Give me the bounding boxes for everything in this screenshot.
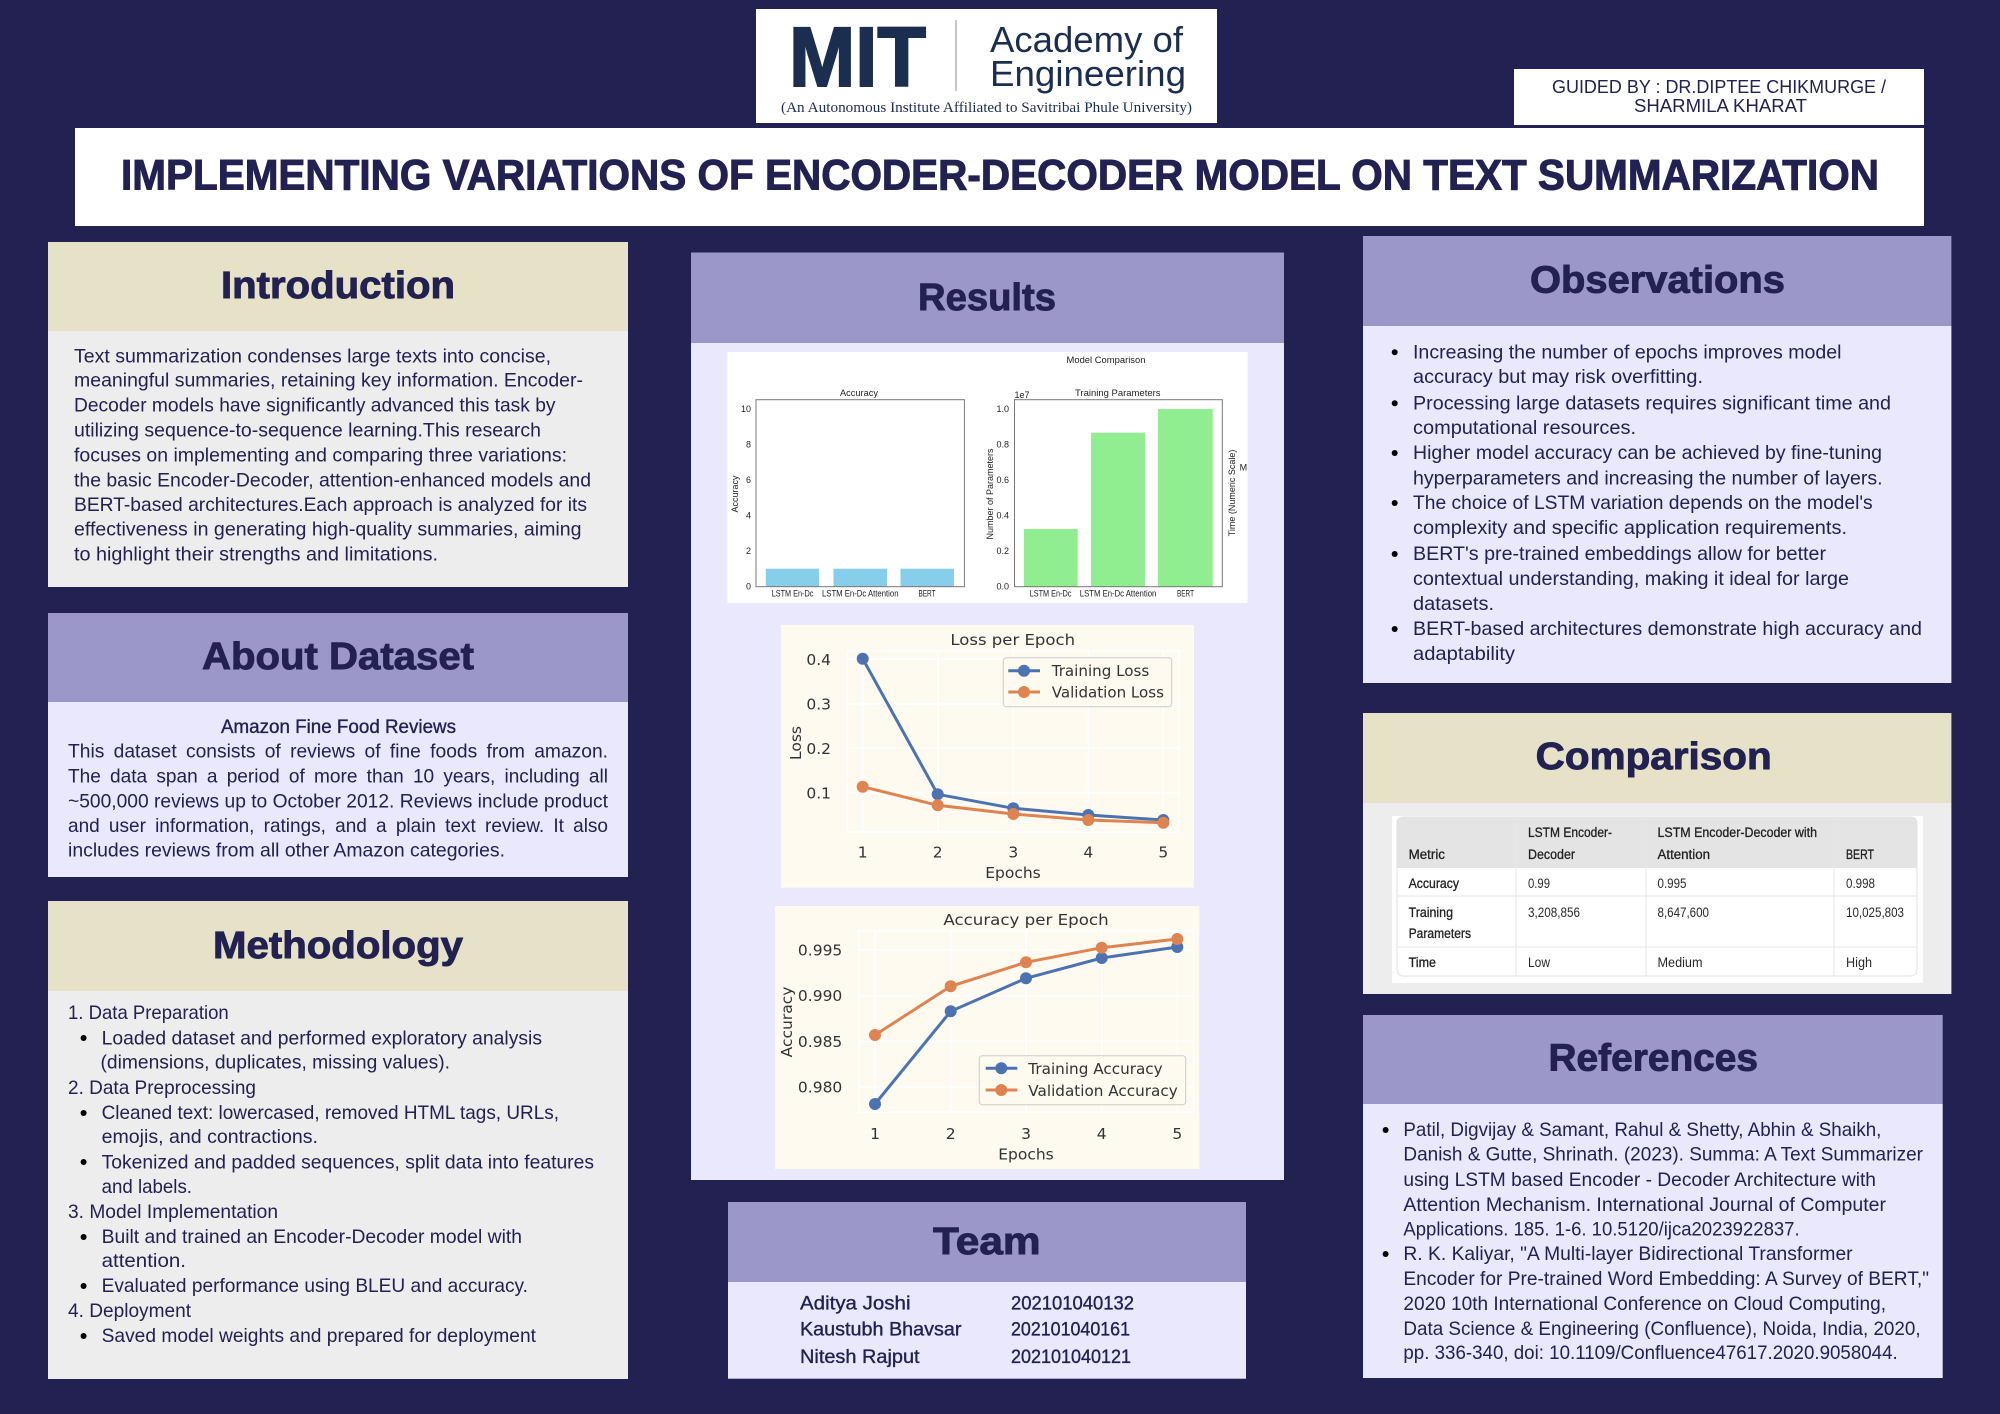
chart: model comparison bars: 0 — [746, 582, 751, 592]
table: model metrics: Decoder — [1528, 847, 1575, 862]
panel: methodology — [48, 901, 628, 1379]
panel: observations: contextual understanding, making it ideal for large — [1413, 568, 1849, 590]
panel: team: 202101040161 — [1011, 1319, 1130, 1341]
chart: loss per epoch: Epochs — [985, 864, 1041, 882]
chart: model comparison bars: Training Parameters — [1075, 388, 1161, 398]
panel: team: Aditya Joshi — [800, 1292, 910, 1314]
chart: accuracy per epoch: Accuracy — [778, 987, 796, 1057]
panel: observations: BERT's pre-trained embeddings allow for better — [1413, 543, 1826, 565]
chart: accuracy per epoch: 2 — [946, 1125, 956, 1143]
panel: references: References — [1548, 1038, 1758, 1080]
chart: model comparison bars: 0.0 — [996, 582, 1009, 592]
chart: model comparison bars: Model Comparison — [1066, 355, 1146, 365]
chart: model comparison bars: Me — [1240, 463, 1252, 473]
chart: model comparison bars: LSTM En-Dc — [772, 589, 814, 599]
chart: accuracy per epoch: 0.980 — [798, 1078, 842, 1096]
chart: loss per epoch: 4 — [1083, 844, 1093, 862]
chart: accuracy per epoch: 5 — [1172, 1125, 1182, 1143]
chart: accuracy per epoch: 4 — [1097, 1125, 1107, 1143]
chart: loss per epoch: Loss — [787, 726, 805, 760]
logo: MIT Academy of Engineering: MIT — [789, 10, 926, 104]
chart: model comparison bars: 4 — [746, 510, 751, 520]
panel: observations: hyperparameters and increasing the number of layers. — [1413, 467, 1883, 489]
table: model metrics: 0.99 — [1528, 876, 1550, 891]
title — [75, 128, 1924, 226]
panel: references: R. K. Kaliyar, "A Multi-layer Bidirectional Transformer — [1403, 1243, 1853, 1265]
chart: accuracy per epoch: Training Accuracy — [1027, 1060, 1163, 1078]
panel: methodology: 3. Model Implementation — [68, 1201, 278, 1223]
table: model metrics: Metric — [1409, 847, 1445, 862]
panel: methodology: Evaluated performance using BLEU and accuracy. — [102, 1275, 528, 1297]
table: model metrics: Training — [1409, 905, 1453, 920]
logo: MIT Academy of Engineering: Engineering — [990, 53, 1186, 94]
panel: comparison: Comparison — [1536, 736, 1772, 778]
table: model metrics: LSTM Encoder- — [1528, 825, 1612, 840]
panel: introduction: focuses on implementing and comparing three variations: — [74, 445, 567, 467]
panel: about dataset: The data span a period of more than 10 years, including all — [68, 766, 608, 788]
panel: about dataset: and user information, ratings, and a plain text review. It also — [68, 815, 608, 837]
panel: methodology: (dimensions, duplicates, missing values). — [100, 1051, 450, 1073]
panel: introduction — [48, 242, 628, 587]
chart: model comparison bars: 10 — [741, 404, 751, 414]
panel: team — [728, 1202, 1246, 1379]
panel: observations: Increasing the number of epochs improves model — [1413, 341, 1842, 363]
chart: loss per epoch: 3 — [1008, 844, 1018, 862]
panel: about dataset: This dataset consists of reviews of fine foods from amazon. — [68, 741, 608, 763]
chart: accuracy per epoch: 0.990 — [798, 987, 842, 1005]
panel: methodology: 2. Data Preprocessing — [68, 1077, 256, 1099]
panel: references: Encoder for Pre-trained Word Embedding: A Survey of BERT," — [1403, 1268, 1929, 1290]
panel: observations: BERT-based architectures demonstrate high accuracy and — [1413, 618, 1922, 640]
table: model metrics: 0.995 — [1658, 876, 1686, 891]
panel: team: 202101040132 — [1011, 1292, 1134, 1314]
panel: introduction: Text summarization condenses large texts into concise, — [74, 346, 551, 368]
panel: references: Patil, Digvijay & Samant, Rahul & Shetty, Abhin & Shaikh, — [1403, 1119, 1881, 1141]
table: model metrics: Accuracy — [1409, 876, 1459, 891]
logo: MIT Academy of Engineering: Academy of — [990, 19, 1184, 60]
chart: loss per epoch: Validation Loss — [1052, 683, 1164, 701]
panel: methodology: Methodology — [213, 925, 463, 967]
chart: model comparison bars: 0.4 — [996, 510, 1009, 520]
panel: observations: computational resources. — [1413, 417, 1636, 439]
table: model metrics: LSTM Encoder-Decoder with — [1658, 825, 1817, 840]
table: model metrics — [1392, 816, 1923, 983]
panel: observations: The choice of LSTM variation depends on the model's — [1413, 492, 1873, 514]
panel: team: Kaustubh Bhavsar — [800, 1319, 962, 1341]
chart: model comparison bars: 1.0 — [996, 404, 1009, 414]
chart: loss per epoch: 0.4 — [806, 651, 831, 669]
guide credit box — [1514, 69, 1924, 125]
chart: model comparison bars: 0.2 — [996, 546, 1009, 556]
panel: references: Applications. 185. 1-6. 10.5120/ijca2023922837. — [1403, 1218, 1800, 1240]
table: model metrics: Medium — [1658, 955, 1702, 970]
panel: introduction: Decoder models have significantly advanced this task by — [74, 395, 556, 417]
table: model metrics: 10,025,803 — [1846, 905, 1904, 920]
chart: loss per epoch: Training Loss — [1051, 662, 1149, 680]
logo: MIT Academy of Engineering — [756, 9, 1217, 123]
chart: model comparison bars: 8 — [746, 440, 751, 450]
chart: model comparison bars: 0.6 — [996, 475, 1009, 485]
chart: accuracy per epoch: 0.985 — [798, 1033, 842, 1051]
panel: references: Attention Mechanism. International Journal of Computer — [1403, 1194, 1887, 1216]
table: model metrics: Attention — [1658, 847, 1710, 862]
panel: methodology: Tokenized and padded sequences, split data into features — [102, 1151, 594, 1173]
chart: loss per epoch: 0.2 — [806, 740, 831, 758]
panel: comparison — [1363, 713, 1951, 994]
panel: methodology: Built and trained an Encoder-Decoder model with — [102, 1226, 522, 1248]
panel: references — [1363, 1015, 1943, 1378]
panel: about dataset — [48, 613, 628, 877]
chart: loss per epoch: 0.1 — [806, 784, 831, 802]
chart: model comparison bars: 2 — [746, 546, 751, 556]
panel: observations: accuracy but may risk overfitting. — [1413, 366, 1703, 388]
guide credit box: GUIDED BY : DR.DIPTEE CHIKMURGE / — [1552, 76, 1887, 97]
panel: results — [691, 252, 1284, 1180]
panel: methodology: 1. Data Preparation — [68, 1002, 229, 1024]
table: model metrics: 0.998 — [1846, 876, 1875, 891]
panel: methodology: 4. Deployment — [68, 1300, 192, 1322]
panel: methodology: emojis, and contractions. — [102, 1126, 318, 1148]
chart: model comparison bars: Number of Parameters — [985, 448, 995, 540]
panel: methodology: Saved model weights and prepared for deployment — [102, 1325, 537, 1347]
panel: observations — [1363, 236, 1951, 683]
chart: accuracy per epoch: 3 — [1021, 1125, 1031, 1143]
panel: observations: adaptability — [1413, 643, 1515, 665]
chart: model comparison bars: LSTM En-Dc — [1030, 589, 1072, 599]
chart: accuracy per epoch: 0.995 — [798, 942, 842, 960]
panel: observations: Processing large datasets requires significant time and — [1413, 392, 1891, 414]
chart: accuracy per epoch — [775, 906, 1199, 1169]
table: model metrics: 3,208,856 — [1528, 905, 1580, 920]
panel: references: 2020 10th International Conference on Cloud Computing, — [1403, 1293, 1886, 1315]
chart: model comparison bars: 6 — [746, 475, 751, 485]
chart: model comparison bars: LSTM En-Dc Attention — [822, 589, 898, 599]
panel: observations: datasets. — [1413, 593, 1494, 615]
chart: model comparison bars: BERT — [918, 589, 936, 599]
table: model metrics: High — [1846, 955, 1872, 970]
panel: introduction: utilizing sequence-to-sequence learning.This research — [74, 420, 541, 442]
chart: loss per epoch: Loss per Epoch — [950, 631, 1075, 649]
chart: model comparison bars: Time (Numeric Scale) — [1227, 450, 1237, 536]
chart: model comparison bars: Accuracy — [730, 475, 740, 513]
table: model metrics: Parameters — [1409, 926, 1471, 941]
panel: about dataset: includes reviews from all other Amazon categories. — [68, 840, 505, 862]
panel: methodology: and labels. — [102, 1176, 192, 1198]
logo: MIT Academy of Engineering: (An Autonomous Institute Affiliated to Savitribai Phule University) — [781, 100, 1192, 116]
chart: model comparison bars: BERT — [1177, 589, 1194, 599]
panel: observations: Observations — [1530, 260, 1785, 302]
chart: accuracy per epoch: Validation Accuracy — [1028, 1082, 1178, 1100]
panel: methodology: Cleaned text: lowercased, removed HTML tags, URLs, — [102, 1102, 559, 1124]
panel: introduction: Introduction — [221, 265, 455, 307]
table: model metrics: Time — [1409, 955, 1436, 970]
chart: accuracy per epoch: 1 — [870, 1125, 880, 1143]
table: model metrics: Low — [1528, 955, 1550, 970]
panel: introduction: BERT-based architectures.Each approach is analyzed for its — [74, 494, 587, 516]
table: model metrics: BERT — [1846, 847, 1874, 862]
panel: about dataset: Amazon Fine Food Reviews — [221, 716, 456, 738]
panel: introduction: meaningful summaries, retaining key information. Encoder- — [74, 370, 583, 392]
panel: references: Danish & Gutte, Shrinath. (2023). Summa: A Text Summarizer — [1403, 1144, 1923, 1166]
panel: introduction: effectiveness in generating high-quality summaries, aiming — [74, 519, 582, 541]
panel: methodology: attention. — [102, 1250, 186, 1272]
panel: observations: Higher model accuracy can be achieved by fine-tuning — [1413, 442, 1882, 464]
panel: introduction: the basic Encoder-Decoder, attention-enhanced models and — [74, 470, 591, 492]
chart: loss per epoch: 1 — [858, 844, 868, 862]
panel: references: pp. 336-340, doi: 10.1109/Confluence47617.2020.9058044. — [1403, 1342, 1898, 1364]
chart: model comparison bars — [728, 352, 1252, 603]
table: model metrics: 8,647,600 — [1658, 905, 1709, 920]
chart: loss per epoch — [781, 625, 1194, 888]
panel: methodology: Loaded dataset and performed exploratory analysis — [102, 1027, 542, 1049]
chart: loss per epoch: 0.3 — [806, 696, 831, 714]
panel: results: Results — [918, 277, 1056, 319]
panel: team: Nitesh Rajput — [800, 1346, 920, 1368]
chart: model comparison bars: 1e7 — [1014, 390, 1030, 400]
chart: accuracy per epoch: Accuracy per Epoch — [943, 911, 1109, 929]
panel: about dataset: ~500,000 reviews up to October 2012. Reviews include product — [68, 791, 609, 813]
chart: accuracy per epoch: Epochs — [998, 1145, 1054, 1163]
chart: model comparison bars: 0.8 — [996, 440, 1009, 450]
panel: introduction: to highlight their strengths and limitations. — [74, 544, 438, 566]
panel: observations: complexity and specific application requirements. — [1413, 517, 1847, 539]
panel: team: 202101040121 — [1011, 1346, 1131, 1368]
chart: loss per epoch: 2 — [933, 844, 943, 862]
panel: team: Team — [933, 1221, 1041, 1263]
chart: model comparison bars: Accuracy — [840, 388, 879, 398]
guide credit box: SHARMILA KHARAT — [1634, 95, 1807, 116]
panel: references: Data Science & Engineering (Confluence), Noida, India, 2020, — [1403, 1318, 1921, 1340]
panel: about dataset: About Dataset — [202, 636, 474, 678]
chart: loss per epoch: 5 — [1158, 844, 1168, 862]
title: IMPLEMENTING VARIATIONS OF ENCODER-DECODER MODEL ON TEXT SUMMARIZATION — [121, 152, 1879, 200]
panel: references: using LSTM based Encoder - Decoder Architecture with — [1403, 1169, 1876, 1191]
chart: model comparison bars: LSTM En-Dc Attention — [1080, 589, 1156, 599]
